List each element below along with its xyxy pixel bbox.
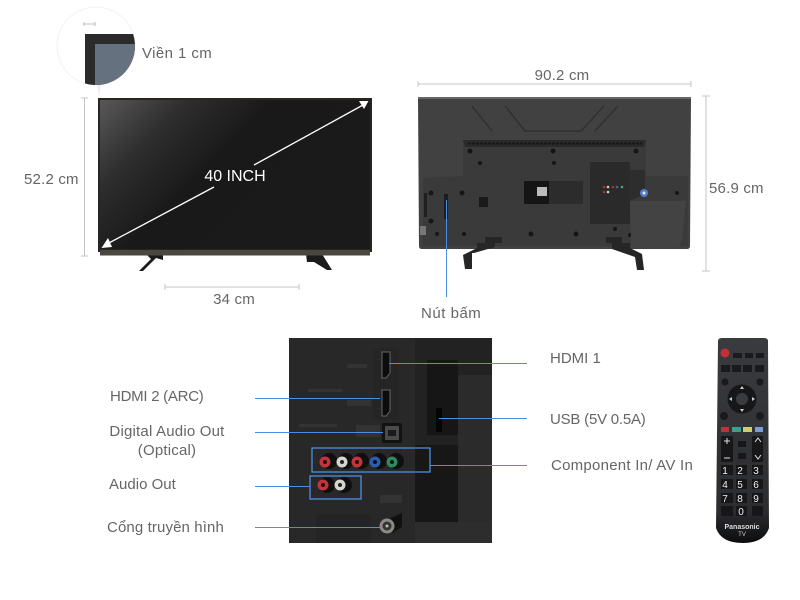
number labels: 4 bbox=[722, 480, 728, 491]
right back stand bbox=[606, 237, 644, 270]
button callout: Nút bấm bbox=[421, 305, 481, 322]
audio jacks bbox=[318, 477, 352, 493]
callout: Digital Audio Out: (Optical) bbox=[138, 442, 196, 459]
width dimension: back: 90.2 cm bbox=[535, 67, 589, 84]
TV back view bbox=[418, 97, 691, 270]
button strip bbox=[444, 194, 448, 219]
callout: HDMI 1: HDMI 1 bbox=[550, 350, 601, 367]
width dimension: back bbox=[418, 67, 691, 87]
remote control: TV bbox=[738, 532, 746, 538]
icon: bezel zoom circle bbox=[56, 6, 136, 96]
number labels: 0 bbox=[738, 507, 744, 518]
stand width dimension: 34 cm bbox=[213, 291, 255, 308]
number labels bbox=[722, 466, 759, 518]
callout: HDMI 2: HDMI 2 (ARC) bbox=[110, 388, 204, 405]
ports photo bbox=[289, 338, 492, 543]
stand width dimension bbox=[165, 284, 299, 308]
optical port bbox=[382, 423, 402, 443]
number labels: 5 bbox=[737, 480, 743, 491]
power socket bbox=[479, 197, 488, 207]
port bay bbox=[590, 162, 630, 224]
diagonal arrow upper bbox=[254, 105, 363, 165]
height dimension: back bbox=[702, 96, 764, 271]
number labels: 7 bbox=[722, 494, 728, 505]
vol and ch bbox=[721, 436, 763, 462]
screen size label: 40 INCH bbox=[204, 168, 266, 185]
callout: USB: USB (5V 0.5A) bbox=[550, 411, 646, 428]
power button bbox=[720, 348, 730, 358]
bezel label: Viền 1 cm bbox=[142, 45, 212, 62]
left stand bbox=[139, 254, 163, 271]
height dimension: front: 52.2 cm bbox=[24, 171, 79, 188]
screw holes bbox=[428, 148, 680, 237]
colour buttons bbox=[721, 427, 763, 432]
tiny ports bbox=[603, 186, 623, 193]
callout: Cổng truyền hình: Cổng truyền hình bbox=[107, 519, 224, 536]
cabinet bbox=[418, 97, 691, 249]
number keys bbox=[721, 465, 763, 516]
callout: Component: Component In/ AV In bbox=[551, 457, 693, 474]
cable cover bbox=[630, 201, 686, 247]
vol and ch marks bbox=[724, 438, 761, 459]
number labels: 9 bbox=[753, 494, 759, 505]
HDMI 1 port bbox=[382, 352, 390, 378]
callout: Audio Out: Audio Out bbox=[109, 476, 177, 493]
height dimension: back: 56.9 cm bbox=[709, 180, 764, 197]
right stand bbox=[306, 254, 332, 270]
HDMI panel outline bbox=[373, 348, 399, 420]
HDMI 2 port bbox=[382, 390, 390, 416]
brand: Panasonic bbox=[724, 524, 760, 531]
faint labels bbox=[299, 364, 402, 543]
number labels: 6 bbox=[753, 480, 759, 491]
d-pad bbox=[728, 384, 756, 414]
antenna port bbox=[388, 513, 402, 533]
component jacks bbox=[320, 453, 404, 469]
left back stand bbox=[463, 237, 502, 269]
sticker bbox=[524, 181, 549, 204]
remote control bbox=[716, 338, 769, 543]
diagonal arrow lower bbox=[107, 187, 214, 244]
number labels: 3 bbox=[753, 466, 759, 477]
callout: Digital Audio Out: Digital Audio Out bbox=[109, 423, 225, 440]
USB port bbox=[436, 408, 442, 432]
height dimension: front bbox=[24, 98, 88, 256]
raised centre bbox=[423, 140, 688, 246]
number labels: 2 bbox=[737, 466, 743, 477]
frame bbox=[98, 98, 372, 252]
number labels: 1 bbox=[722, 466, 728, 477]
TV front view bbox=[98, 98, 372, 271]
USB bay bbox=[427, 360, 458, 435]
callout: Digital Audio Out bbox=[109, 423, 383, 459]
blue cap bbox=[640, 189, 648, 197]
button callout bbox=[421, 200, 481, 322]
number labels: 8 bbox=[737, 494, 743, 505]
top buttons bbox=[720, 353, 764, 420]
screen bbox=[100, 100, 370, 249]
chevrons bbox=[472, 106, 618, 131]
callout boxes bbox=[310, 448, 430, 499]
